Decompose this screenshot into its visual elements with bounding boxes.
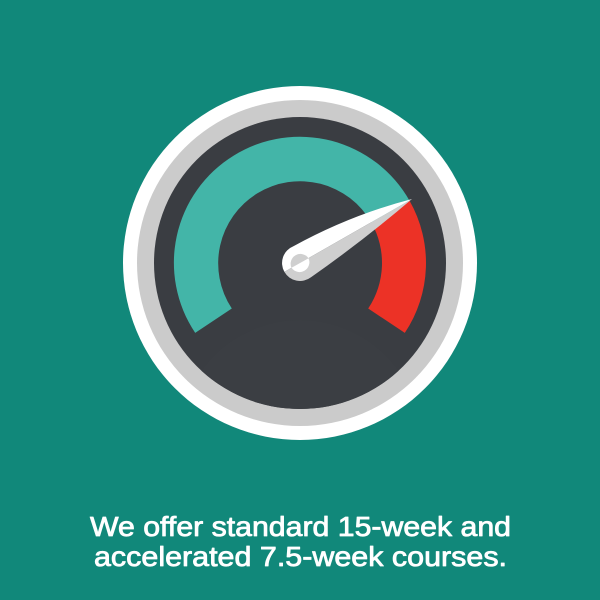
gauge grey bezel	[137, 100, 463, 426]
needle grey lower half	[284, 199, 412, 281]
needle hub white half	[292, 258, 309, 272]
caption line 2: accelerated 7.5-week courses.	[94, 541, 507, 572]
needle hub grey half	[291, 254, 308, 268]
caption line 1: We offer standard 15-week and	[90, 511, 511, 542]
red speed arc	[368, 201, 426, 333]
needle white upper half	[282, 199, 412, 272]
needle	[282, 199, 412, 281]
teal speed arc	[174, 137, 410, 333]
speedometer gauge	[123, 86, 477, 440]
gauge white outer ring	[123, 86, 477, 440]
dial lower faint highlight	[202, 370, 398, 409]
caption	[90, 511, 511, 572]
gauge dark dial face	[154, 117, 446, 409]
